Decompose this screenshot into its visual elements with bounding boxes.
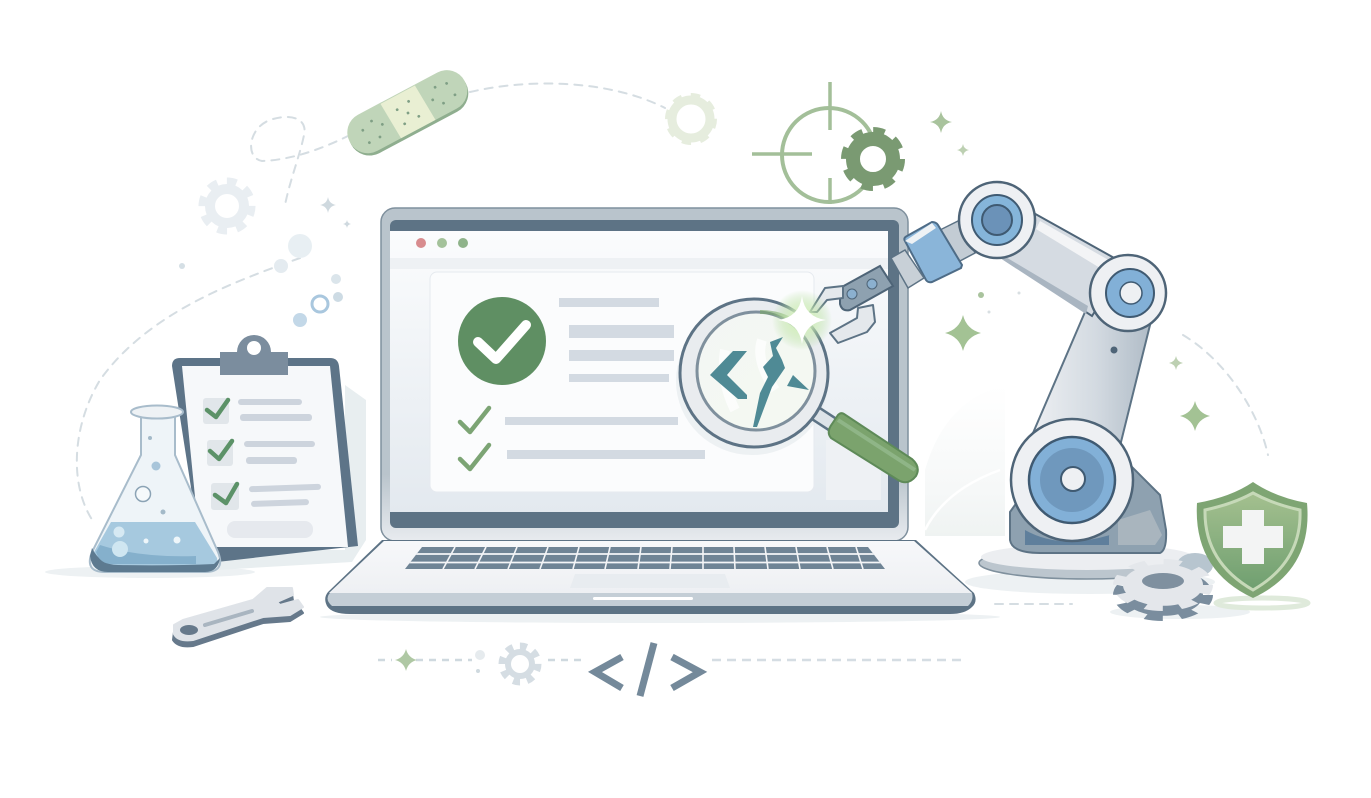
clipboard paper	[182, 366, 348, 547]
flask liquid	[92, 522, 217, 570]
background wash behind robot	[925, 385, 1005, 536]
clipboard	[172, 335, 366, 570]
icon: target with gear	[752, 82, 900, 204]
checklist rows	[203, 398, 321, 538]
laptop base	[325, 540, 976, 614]
elbow joint	[1090, 255, 1166, 331]
laptop	[325, 208, 976, 614]
blue wrist	[904, 222, 962, 282]
broken code glyph	[710, 337, 809, 427]
wrench	[173, 588, 303, 646]
icon: pale gear top	[668, 96, 714, 142]
trackpad	[570, 574, 730, 588]
icon: pale gear left	[203, 182, 251, 230]
keyboard	[400, 547, 890, 569]
robot arm	[810, 182, 1195, 579]
text lines	[505, 298, 705, 459]
laptop screen	[390, 231, 888, 512]
icon: bandage	[340, 63, 476, 163]
code symbol	[595, 643, 700, 696]
small checks	[460, 408, 489, 469]
wrist collar	[891, 250, 924, 288]
browser dots	[416, 238, 468, 248]
gripper claws	[810, 286, 875, 343]
window panel	[430, 272, 814, 492]
flask	[90, 406, 220, 572]
base plate	[979, 544, 1195, 579]
base joint	[1011, 419, 1133, 541]
clipboard clip	[220, 335, 288, 375]
magnifier handle	[815, 413, 918, 482]
spark	[772, 290, 832, 350]
ground shadows	[45, 566, 1250, 623]
gripper neck	[940, 220, 975, 268]
dashed connector paths	[77, 84, 1268, 604]
upper arm	[1000, 211, 1125, 316]
big check badge	[458, 297, 546, 385]
magnifier lens	[680, 299, 828, 447]
magnifier	[676, 299, 918, 482]
gripper head	[840, 266, 893, 310]
pedestal	[1010, 455, 1166, 553]
laptop lid	[381, 208, 908, 541]
shield cross	[1223, 510, 1283, 564]
shoulder joint	[959, 182, 1035, 258]
lower arm	[1030, 305, 1150, 450]
shield	[1197, 482, 1308, 608]
small gear	[1119, 553, 1213, 618]
sparkles and bubbles	[179, 111, 1210, 431]
bottom divider with code glyph	[378, 643, 963, 696]
clipboard board	[172, 358, 358, 562]
